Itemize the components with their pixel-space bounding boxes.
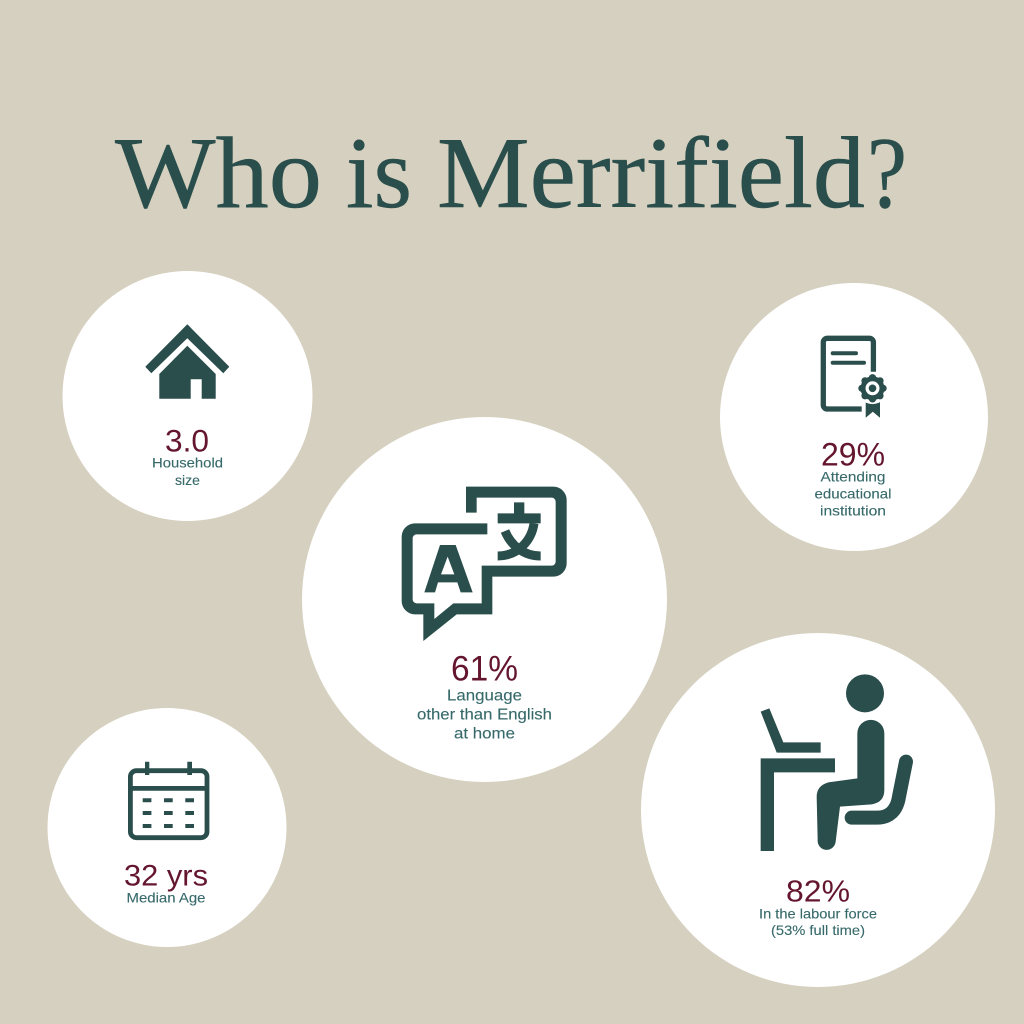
panel circle: age [48, 708, 286, 947]
label: attending educational institution: educational [814, 486, 892, 502]
panel circle: household [62, 271, 312, 521]
label: household size [152, 454, 223, 488]
title: ? [867, 117, 907, 230]
panel circle: education [720, 283, 988, 551]
title: is [346, 117, 412, 230]
panel: language other than English [302, 417, 667, 782]
label: language other than English at home: at home [454, 725, 515, 742]
panel: median age [48, 708, 286, 947]
panel: attending educational institution [720, 283, 988, 551]
label: in the labour force, 53% full time: (53% full time) [771, 922, 865, 938]
stat: 32 yrs: 32 yrs [124, 860, 208, 892]
label: attending educational institution: Attending [820, 469, 886, 485]
icon: calendar [130, 762, 207, 838]
panel: labour force [641, 633, 995, 987]
stat: 3.0: 3.0 [165, 422, 209, 458]
title: Who [115, 117, 322, 230]
label: language other than English at home [417, 688, 552, 742]
stat: 61%: 61% [451, 650, 518, 688]
stat: 82%: 82% [786, 874, 850, 909]
label: median age: Median Age [126, 890, 206, 906]
label: attending educational institution [814, 469, 892, 518]
label: language other than English at home: other than English [417, 706, 552, 723]
title: Merrifield [437, 117, 865, 230]
icon: person at desk with laptop [761, 674, 906, 851]
label: in the labour force, 53% full time: In the labour force [759, 905, 877, 921]
label: household size: Household [152, 454, 223, 470]
stat: 29%: 29% [821, 436, 885, 472]
panel circle: language [302, 417, 667, 782]
label: attending educational institution: institution [820, 502, 886, 518]
icon: translation speech bubbles [402, 487, 567, 641]
label: language other than English at home: Language [447, 688, 522, 705]
icon: certificate [823, 338, 888, 418]
label: household size: size [175, 472, 200, 488]
label: in the labour force, 53% full time [759, 905, 877, 938]
panel: household size [62, 271, 312, 521]
panel circle: labour force [641, 633, 995, 987]
title [115, 117, 907, 230]
icon: house [145, 324, 229, 399]
